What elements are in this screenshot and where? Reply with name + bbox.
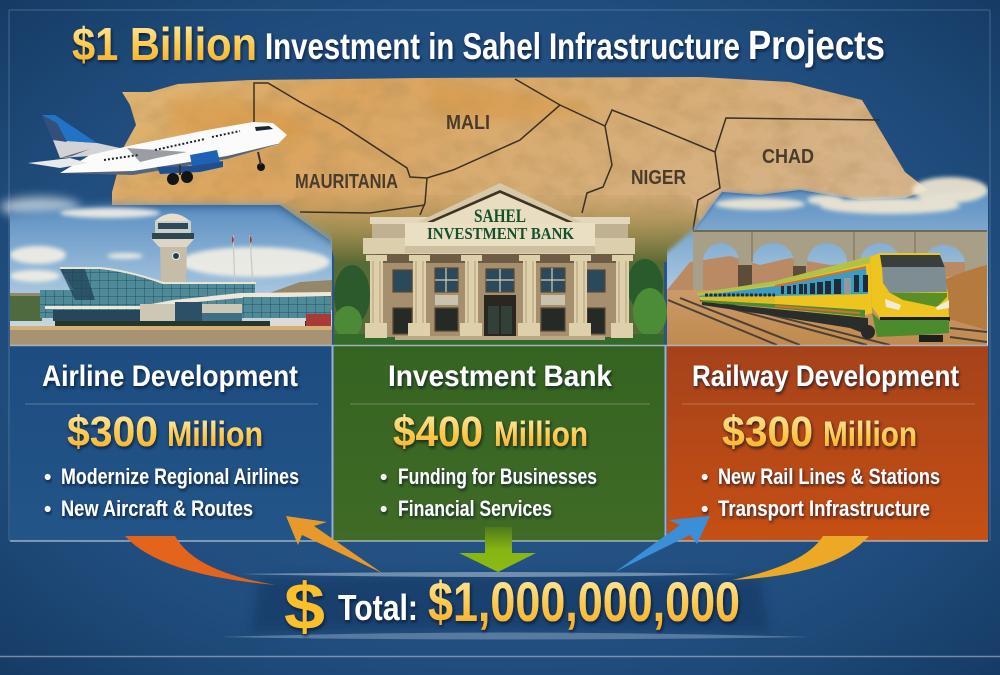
country labels	[295, 112, 814, 193]
amount: Million	[494, 415, 588, 454]
bullets: •	[701, 466, 708, 489]
tarmac	[10, 330, 332, 345]
bank name: INVESTMENT BANK	[427, 224, 575, 243]
amount: $300	[722, 408, 813, 456]
africa map	[112, 77, 928, 262]
columns	[365, 255, 633, 338]
arrow: to railway, yellow curve	[732, 536, 869, 580]
amount: $300	[67, 408, 158, 456]
distant hills	[10, 280, 332, 310]
amount: Million	[823, 415, 917, 454]
heading: Investment Bank	[388, 360, 612, 393]
bullets: •	[380, 498, 387, 521]
pediment	[418, 183, 582, 222]
panel: investment bank	[334, 346, 664, 541]
arrow: to bank	[459, 527, 536, 572]
terminal	[40, 268, 331, 328]
bullets: •	[44, 466, 51, 489]
scene: airport	[10, 199, 332, 345]
control tower	[151, 214, 195, 283]
title: $1 Billion	[72, 18, 257, 70]
scene: railway	[667, 174, 988, 345]
rail tracks	[668, 298, 987, 345]
total label: Total:	[338, 587, 418, 628]
bullets	[44, 464, 299, 521]
bullets: •	[701, 498, 708, 521]
arrow: to railway, straight	[615, 516, 710, 572]
heading: Airline Development	[42, 360, 298, 393]
amount	[722, 408, 917, 456]
wall	[375, 253, 625, 337]
train cab	[870, 253, 949, 318]
country borders	[254, 79, 880, 230]
country labels: CHAD	[762, 146, 814, 168]
heading: Railway Development	[692, 360, 959, 393]
title	[72, 18, 885, 70]
arrow: to airline, straight	[286, 516, 382, 573]
panel: railway development	[667, 346, 988, 541]
bullets: New Rail Lines & Stations	[718, 464, 940, 489]
train windows	[705, 275, 868, 295]
title: Projects	[748, 22, 885, 68]
bullets: Transport Infrastructure	[718, 496, 930, 521]
bullets	[701, 464, 940, 521]
bank name	[427, 206, 575, 243]
desert ground	[667, 272, 987, 345]
bullets: Financial Services	[398, 496, 552, 521]
country labels: NIGER	[631, 167, 686, 189]
frame lines	[9, 10, 990, 541]
amount: Million	[167, 415, 263, 454]
country labels: MALI	[446, 112, 490, 134]
amount	[67, 408, 263, 456]
stone viaduct	[693, 230, 987, 290]
door	[484, 295, 516, 336]
trees	[334, 259, 667, 338]
train	[697, 253, 950, 342]
bank name: SAHEL	[474, 206, 526, 227]
bullets: Funding for Businesses	[398, 464, 597, 489]
dividers	[0, 345, 1000, 656]
total banner	[220, 569, 810, 643]
bullets	[380, 464, 597, 521]
amount: $400	[393, 408, 483, 456]
flag poles	[233, 235, 253, 288]
title: Investment in Sahel Infrastructure	[265, 26, 740, 67]
panel: airline development	[10, 346, 332, 541]
bullets: Modernize Regional Airlines	[61, 464, 299, 489]
bullets: New Aircraft & Routes	[61, 496, 253, 521]
country labels: MAURITANIA	[295, 171, 398, 193]
hills	[667, 256, 965, 290]
scene: bank	[334, 183, 667, 345]
airplane	[28, 115, 287, 185]
amount	[393, 408, 588, 456]
side wings	[363, 238, 635, 254]
entablature	[405, 223, 595, 253]
bullets: •	[380, 466, 387, 489]
icon: dollar sign: $	[284, 569, 325, 643]
arrow: to airline, orange curve	[125, 536, 276, 585]
total amount: $1,000,000,000	[428, 570, 740, 633]
windows	[393, 268, 605, 292]
bullets: •	[44, 498, 51, 521]
clouds left	[0, 197, 80, 217]
